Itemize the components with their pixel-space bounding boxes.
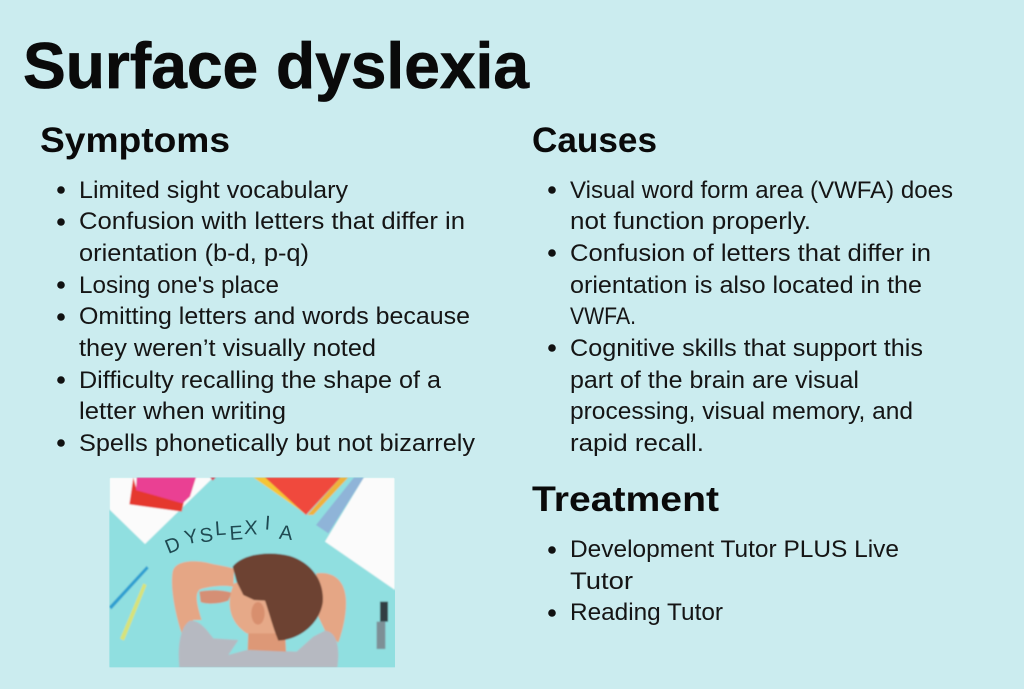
panel: symptoms: [40, 121, 475, 457]
causes list: part of the brain are visual: [570, 367, 859, 394]
causes list: [548, 177, 953, 457]
title: Surface dyslexia: [23, 29, 530, 102]
symptoms list: [57, 177, 475, 457]
causes list: Cognitive skills that support this: [570, 335, 923, 362]
word on the background: X: [244, 517, 258, 539]
treatment list: Development Tutor PLUS Live: [570, 536, 899, 563]
shirt: [179, 621, 338, 667]
word on the background: S: [198, 524, 215, 548]
causes list: processing, visual memory, and: [570, 398, 913, 425]
treatment list: [548, 536, 899, 626]
panel: causes: [532, 121, 953, 457]
symptoms list: Confusion with letters that differ in: [79, 208, 465, 235]
word on the background: Y: [182, 525, 200, 550]
word on the background: I: [264, 512, 271, 535]
causes list: not function properly.: [570, 208, 811, 235]
word on the background: A: [278, 522, 294, 545]
hair: [233, 553, 323, 641]
face: [230, 580, 277, 633]
blue folder and white sheets, right: [316, 477, 364, 533]
causes list: rapid recall.: [570, 430, 704, 457]
heading: symptoms: Symptoms: [40, 121, 230, 160]
causes list: Visual word form area (VWFA) does: [570, 177, 953, 204]
symptoms list: they weren’t visually noted: [79, 335, 376, 362]
neck: [248, 630, 286, 652]
heading: causes: Causes: [532, 121, 657, 160]
word on the background: E: [229, 522, 244, 545]
treatment list: Tutor: [570, 568, 633, 595]
pen: [380, 602, 388, 622]
books top left: [129, 477, 184, 512]
symptoms list: Spells phonetically but not bizarrely: [79, 430, 475, 457]
symptoms list: orientation (b-d, p-q): [79, 240, 309, 267]
left hand: [199, 590, 232, 604]
books top centre: [253, 477, 306, 515]
symptoms list: Difficulty recalling the shape of a: [79, 367, 442, 394]
panel: treatment: [532, 480, 899, 626]
word on the background: L: [214, 518, 227, 540]
causes list: VWFA.: [570, 303, 636, 330]
heading: treatment: Treatment: [532, 480, 719, 519]
right arm: [316, 573, 346, 643]
treatment list: Reading Tutor: [570, 599, 723, 626]
word on the background: D: [162, 533, 184, 559]
white sheet top left: [109, 477, 213, 544]
ear: [251, 602, 265, 625]
word on the background: [164, 516, 292, 554]
symptoms list: Losing one's place: [79, 272, 279, 299]
symptoms list: Omitting letters and words because: [79, 303, 470, 330]
photo: boy resting on a desk beneath the word dyslexia: [109, 477, 395, 667]
symptoms list: letter when writing: [79, 398, 286, 425]
causes list: orientation is also located in the: [570, 272, 922, 299]
symptoms list: Limited sight vocabulary: [79, 177, 348, 204]
causes list: Confusion of letters that differ in: [570, 240, 931, 267]
pencils: [109, 566, 149, 609]
left arm: [172, 561, 234, 633]
